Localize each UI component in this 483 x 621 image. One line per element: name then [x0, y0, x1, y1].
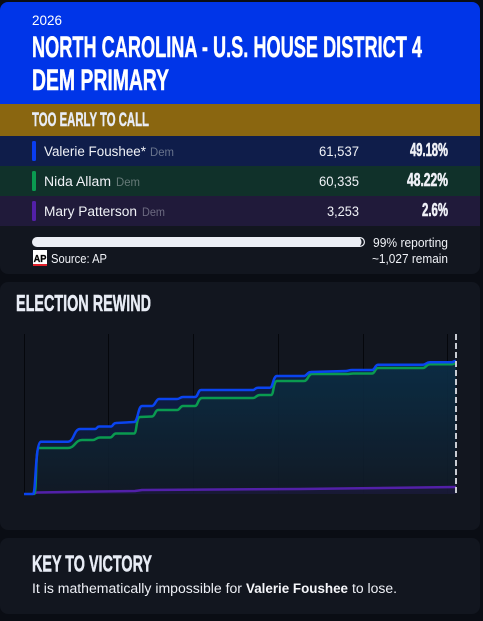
candidate row: Valerie Foushee: Dem [150, 145, 174, 159]
heading: KEY TO VICTORY [32, 550, 152, 576]
candidate row: Valerie Foushee: 49.18% [410, 140, 448, 160]
series: Valerie Foushee [24, 361, 456, 494]
source label: Source: AP [51, 251, 107, 266]
explanation text: It is mathematically impossible for [32, 581, 243, 596]
line chart [24, 334, 456, 494]
panel: key to victory [0, 538, 480, 614]
reporting progress bar [32, 237, 365, 247]
status banner [0, 104, 480, 136]
area fills [24, 361, 456, 494]
panel: race results [0, 2, 480, 274]
header: blue title band: DEM PRIMARY [32, 64, 169, 97]
candidate row: Nida Allam: 48.22% [407, 170, 448, 190]
panel: election rewind [0, 282, 480, 530]
candidate row: Valerie Foushee: 61,537 [319, 144, 359, 159]
candidate row: Valerie Foushee: Valerie Foushee* [44, 144, 147, 159]
explanation text [32, 581, 397, 596]
candidate row: Mary Patterson [0, 196, 480, 226]
candidate row: Mary Patterson: Mary Patterson [44, 204, 137, 219]
header: blue title band [0, 2, 480, 104]
candidate row: Nida Allam: 60,335 [319, 174, 359, 189]
explanation text: Valerie Foushee [246, 581, 348, 596]
series: Nida Allam [34, 363, 456, 494]
explanation text: to lose. [352, 581, 397, 596]
candidate row: Mary Patterson: 2.6% [422, 200, 448, 220]
votes remaining: ~1,027 remain [372, 251, 448, 266]
heading: ELECTION REWIND [16, 290, 151, 316]
status banner: TOO EARLY TO CALL [32, 109, 149, 131]
candidate row: Mary Patterson: 3,253 [327, 204, 359, 219]
series: Mary Patterson [33, 487, 456, 494]
candidate row: Nida Allam: Nida Allam [44, 174, 111, 189]
icon: AP logo: AP [34, 253, 46, 265]
candidate row: Nida Allam: Dem [116, 175, 140, 189]
current-time dashed marker [455, 334, 457, 494]
header: blue title band: 2026 [32, 12, 62, 28]
candidate row: Nida Allam [0, 166, 480, 196]
candidate row: Valerie Foushee [0, 136, 480, 166]
icon: AP logo [33, 250, 47, 266]
reporting text: 99% reporting [373, 235, 448, 250]
candidate row: Mary Patterson: Dem [142, 205, 165, 219]
